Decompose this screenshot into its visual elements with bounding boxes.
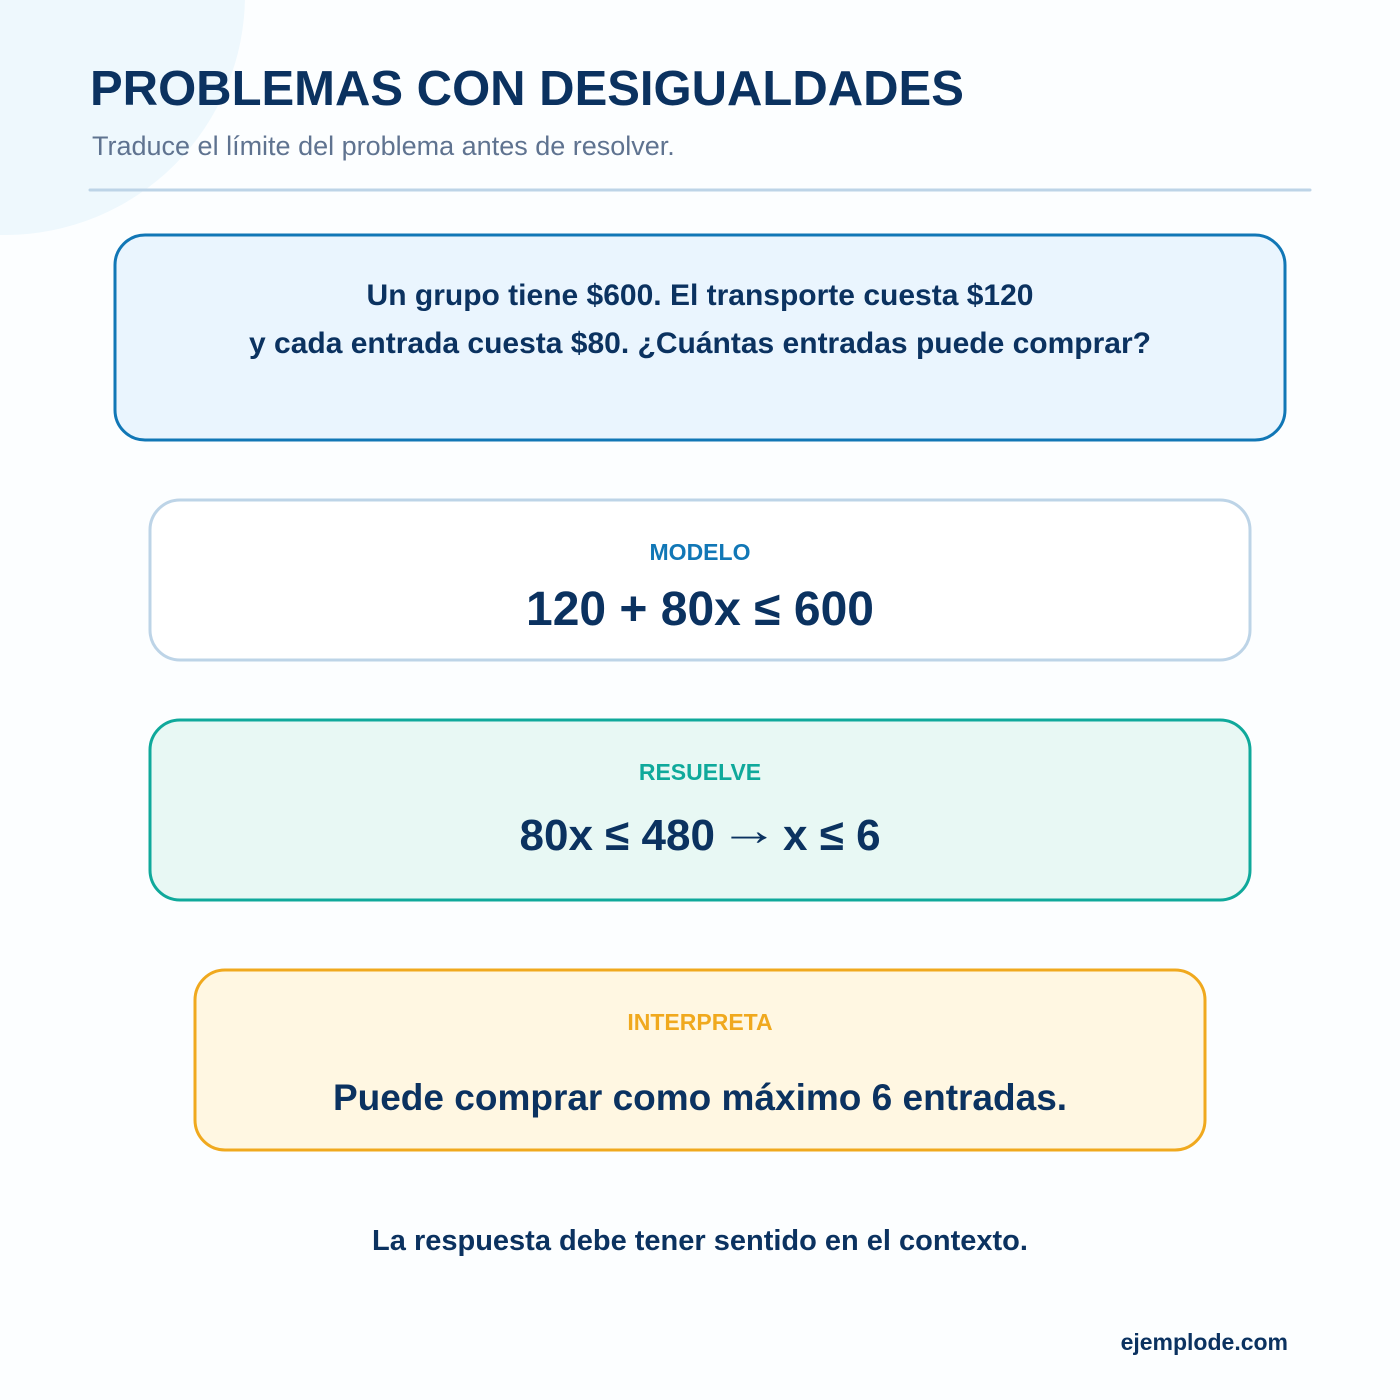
resuelve label: RESUELVE — [639, 759, 761, 785]
modelo label: MODELO — [650, 539, 750, 565]
panel: modelo — [150, 500, 1250, 660]
decorative corner circle — [0, 0, 245, 235]
header divider — [90, 188, 1310, 192]
resuelve steps: 80x ≤ 480 — [520, 811, 715, 860]
modelo inequality: 120 + 80x ≤ 600 — [526, 583, 874, 636]
resuelve steps: x ≤ 6 — [783, 811, 881, 860]
interpreta conclusion: Puede comprar como máximo 6 entradas. — [333, 1077, 1067, 1118]
closing note: La respuesta debe tener sentido en el contexto. — [372, 1225, 1028, 1257]
panel: resuelve — [150, 720, 1250, 900]
interpreta label: INTERPRETA — [627, 1009, 773, 1035]
panel: problem statement — [115, 235, 1285, 440]
footer brand: ejemplode.com — [1121, 1329, 1288, 1355]
panel: interpreta — [195, 970, 1205, 1150]
subtitle: Traduce el límite del problema antes de resolver. — [92, 131, 675, 161]
resuelve steps: → — [719, 806, 779, 855]
title: PROBLEMAS CON DESIGUALDADES — [90, 62, 964, 116]
problem text: Un grupo tiene $600. El transporte cuesta $120 — [367, 279, 1033, 312]
problem text: y cada entrada cuesta $80. ¿Cuántas entradas puede comprar? — [249, 327, 1151, 360]
resuelve steps — [520, 806, 881, 860]
